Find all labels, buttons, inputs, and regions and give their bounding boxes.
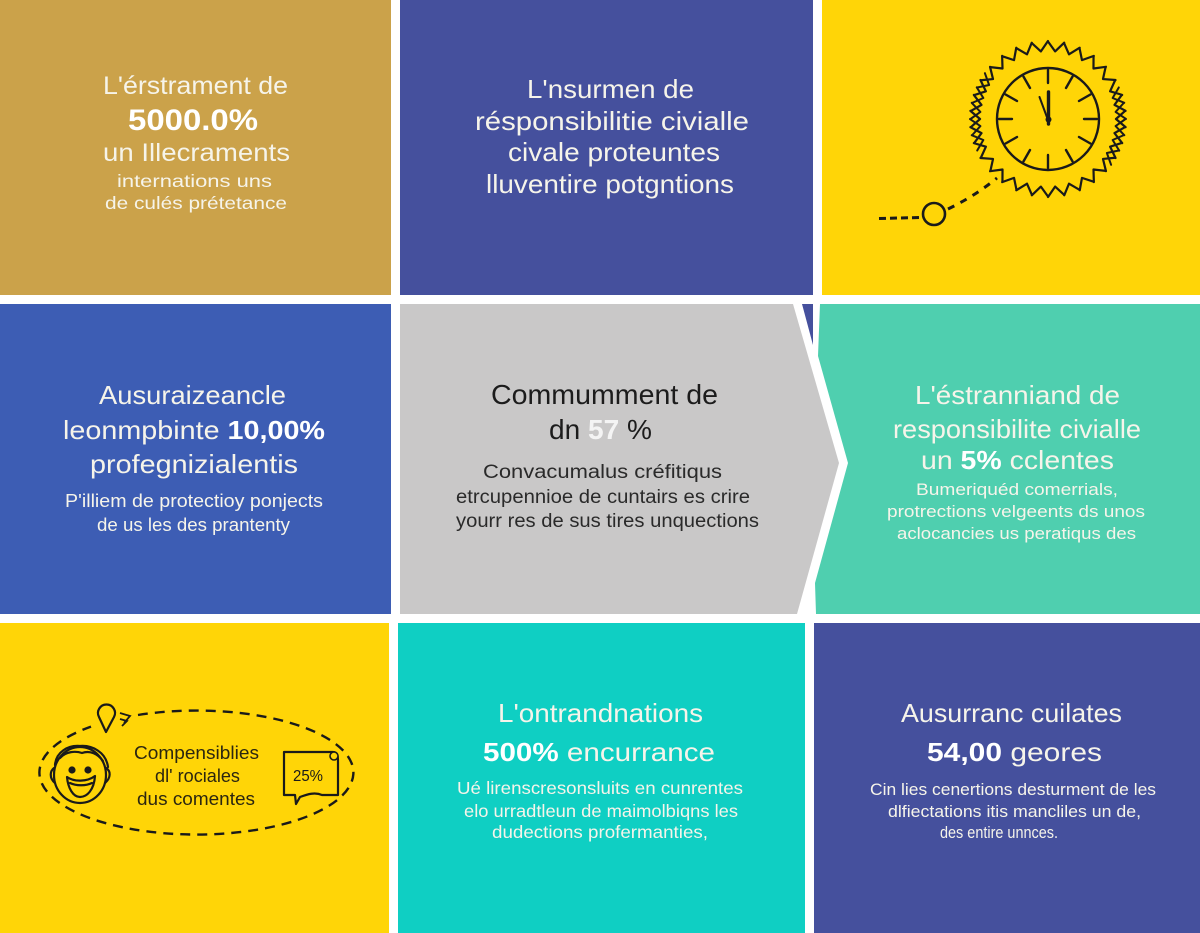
text block: navy bottom panel: Cin lies cenertions desturment de les	[870, 780, 1156, 799]
text block: teal panel	[887, 480, 1145, 543]
text block: teal panel: aclocancies us peratiqus des	[897, 524, 1136, 543]
heading: gold panel: un Illecraments	[103, 139, 290, 167]
heading: navy bottom panel: 54,00 geores	[927, 737, 1102, 767]
text block: blue panel: P'illiem de protectioy ponjects	[65, 491, 323, 511]
heading: navy panel: civale proteuntes	[508, 137, 720, 167]
text block: grey panel: etrcupennioe de cuntairs es crire	[456, 487, 750, 508]
text block: blue panel	[65, 491, 323, 535]
panel: gold top left	[0, 0, 391, 295]
panel: blue middle left	[0, 304, 391, 614]
icon: smiling face	[51, 746, 110, 803]
heading: gold panel	[103, 72, 290, 167]
panel: grey centre arrow	[400, 304, 839, 614]
heading: navy panel	[475, 74, 749, 199]
panel: cyan bottom centre	[398, 623, 805, 933]
heading: navy bottom panel: Ausurranc cuilates	[901, 698, 1122, 728]
panel: yellow clock	[822, 0, 1200, 295]
text block: blue panel: de us les des prantenty	[97, 515, 290, 535]
heading: grey panel: Commumment de	[491, 379, 718, 410]
heading: navy panel: lluventire potgntions	[486, 169, 734, 199]
heading: cyan panel: L'ontrandnations	[498, 698, 703, 728]
icon: arrows	[120, 713, 130, 726]
text block: navy bottom panel: dlfiectations itis mancliles un de,	[888, 802, 1141, 821]
panel: teal middle right	[815, 304, 1200, 614]
heading: blue panel: profegnizialentis	[90, 449, 298, 479]
icon: location pin	[98, 704, 115, 732]
text block: cyan panel	[457, 778, 743, 842]
text block: navy bottom panel: des entire unnces.	[940, 823, 1058, 842]
text block: cyan panel: dudections profermanties,	[492, 822, 708, 842]
heading: gold panel: 5000.0%	[128, 104, 258, 137]
icon: speech bubble 25%: 25%	[293, 768, 323, 785]
heading: teal panel: responsibilite civialle	[893, 414, 1141, 444]
text block: oval caption: Compensiblies	[134, 742, 259, 763]
text block: oval caption	[134, 742, 259, 809]
text block: oval caption: dus comentes	[137, 788, 255, 809]
heading: blue panel	[63, 380, 325, 479]
heading: teal panel: L'éstranniand de	[915, 380, 1120, 410]
text block: grey panel	[456, 462, 759, 532]
text block: grey panel: yourr res de sus tires unquections	[456, 511, 759, 532]
text block: cyan panel: elo urradtleun de maimolbiqns les	[464, 801, 738, 821]
text block: gold panel	[105, 171, 287, 213]
text block: grey panel: Convacumalus créfitiqus	[483, 462, 722, 483]
heading: navy panel: L'nsurmen de	[527, 74, 694, 104]
icon: clock with zigzag ring	[947, 21, 1149, 217]
heading: navy panel: résponsibilitie civialle	[475, 106, 749, 136]
text block: teal panel: protrections velgeents ds unos	[887, 502, 1145, 521]
text block: navy bottom panel	[870, 780, 1156, 842]
panel: yellow bottom left	[0, 623, 389, 933]
panel: navy bottom right	[814, 623, 1200, 933]
panel: navy sliver behind arrow	[802, 304, 813, 345]
heading: navy bottom panel	[901, 698, 1122, 767]
panel: navy top centre	[400, 0, 813, 295]
heading: grey panel	[491, 379, 718, 445]
heading: gold panel: L'érstrament de	[103, 72, 288, 100]
icon: dashed oval	[39, 711, 353, 835]
heading: cyan panel	[483, 698, 715, 767]
heading: teal panel	[893, 380, 1141, 475]
icon: dashed path with circle	[879, 178, 997, 225]
text block: cyan panel: Ué lirenscresonsluits en cunrentes	[457, 778, 743, 798]
text block: oval caption: dl' rociales	[155, 765, 240, 786]
heading: blue panel: leonmpbinte 10,00%	[63, 415, 325, 445]
text block: teal panel: Bumeriquéd comerrials,	[916, 480, 1118, 499]
text block: gold panel: internations uns	[117, 171, 272, 191]
icon: speech bubble 25%	[284, 752, 338, 804]
heading: cyan panel: 500% encurrance	[483, 737, 715, 767]
text block: gold panel: de culés prétetance	[105, 193, 287, 213]
heading: teal panel: un 5% cclentes	[921, 445, 1114, 475]
heading: grey panel: dn 57 %	[549, 414, 652, 445]
heading: blue panel: Ausuraizeancle	[99, 380, 286, 410]
